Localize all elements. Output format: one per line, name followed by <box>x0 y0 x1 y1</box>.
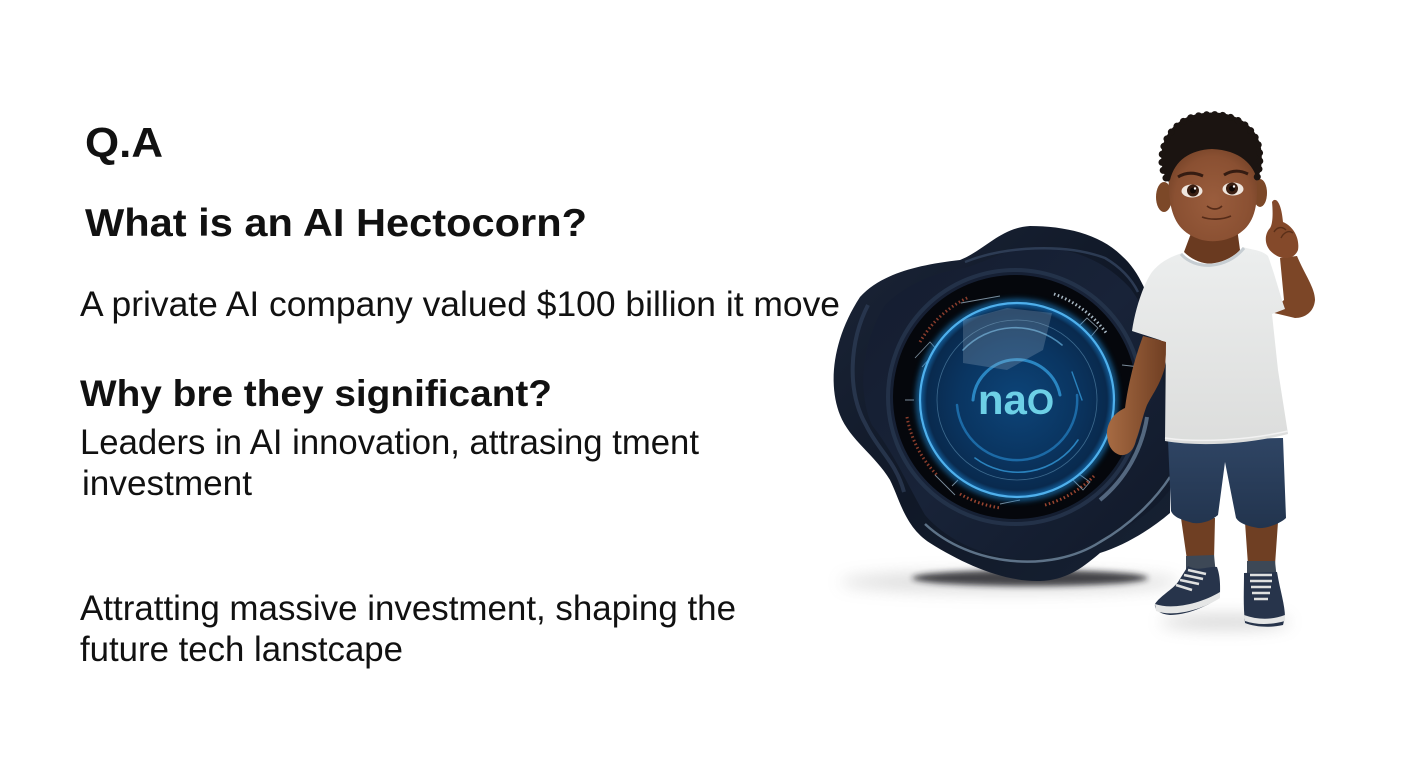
answer 2 text: investment <box>82 464 252 503</box>
eyebrows <box>1178 171 1248 177</box>
face <box>1169 140 1257 241</box>
left shoe <box>1155 566 1220 615</box>
question 2 heading: Why bre they significant? <box>80 373 552 414</box>
glowing ring <box>919 302 1115 498</box>
lens outer rim <box>888 270 1142 524</box>
right shoe <box>1244 572 1285 627</box>
neck <box>1184 228 1240 264</box>
right arm and pointing hand <box>1266 200 1315 318</box>
HUD tick arcs <box>907 294 1107 508</box>
answer 3 text: future tech lanstcape <box>80 630 403 669</box>
blob inner layer <box>863 247 1170 559</box>
logo text: naO <box>978 376 1054 423</box>
answer 1 text: A private AI company valued $100 billion it move <box>80 285 840 324</box>
device: lens blob <box>834 226 1180 592</box>
shorts <box>1168 438 1286 528</box>
legs <box>1181 518 1278 565</box>
inner arcs <box>937 320 1097 480</box>
glass reflection <box>963 308 1052 370</box>
ground shadow <box>840 570 1180 592</box>
answer 3 text: Attratting massive investment, shaping the <box>80 589 736 628</box>
character: boy pointing up <box>1107 113 1315 629</box>
nose and mouth <box>1202 206 1231 219</box>
t-shirt <box>1132 247 1288 444</box>
eyes <box>1182 182 1244 198</box>
shoe shadow <box>1160 615 1290 629</box>
answer 2 text <box>80 423 699 503</box>
blob highlight ridges <box>853 248 1170 562</box>
answer 2 text: Leaders in AI innovation, attrasing tment <box>80 423 699 462</box>
dark lens surround <box>893 275 1137 519</box>
HUD brackets <box>905 296 1140 504</box>
socks <box>1186 555 1277 580</box>
left arm <box>1107 336 1167 455</box>
blob body <box>834 226 1170 581</box>
ears <box>1156 179 1267 212</box>
lens face <box>920 303 1114 497</box>
heading: Q.A: Q.A <box>85 119 163 166</box>
answer 3 text <box>80 589 736 669</box>
question 1 heading: What is an AI Hectocorn? <box>85 202 587 245</box>
hair <box>1161 113 1262 182</box>
